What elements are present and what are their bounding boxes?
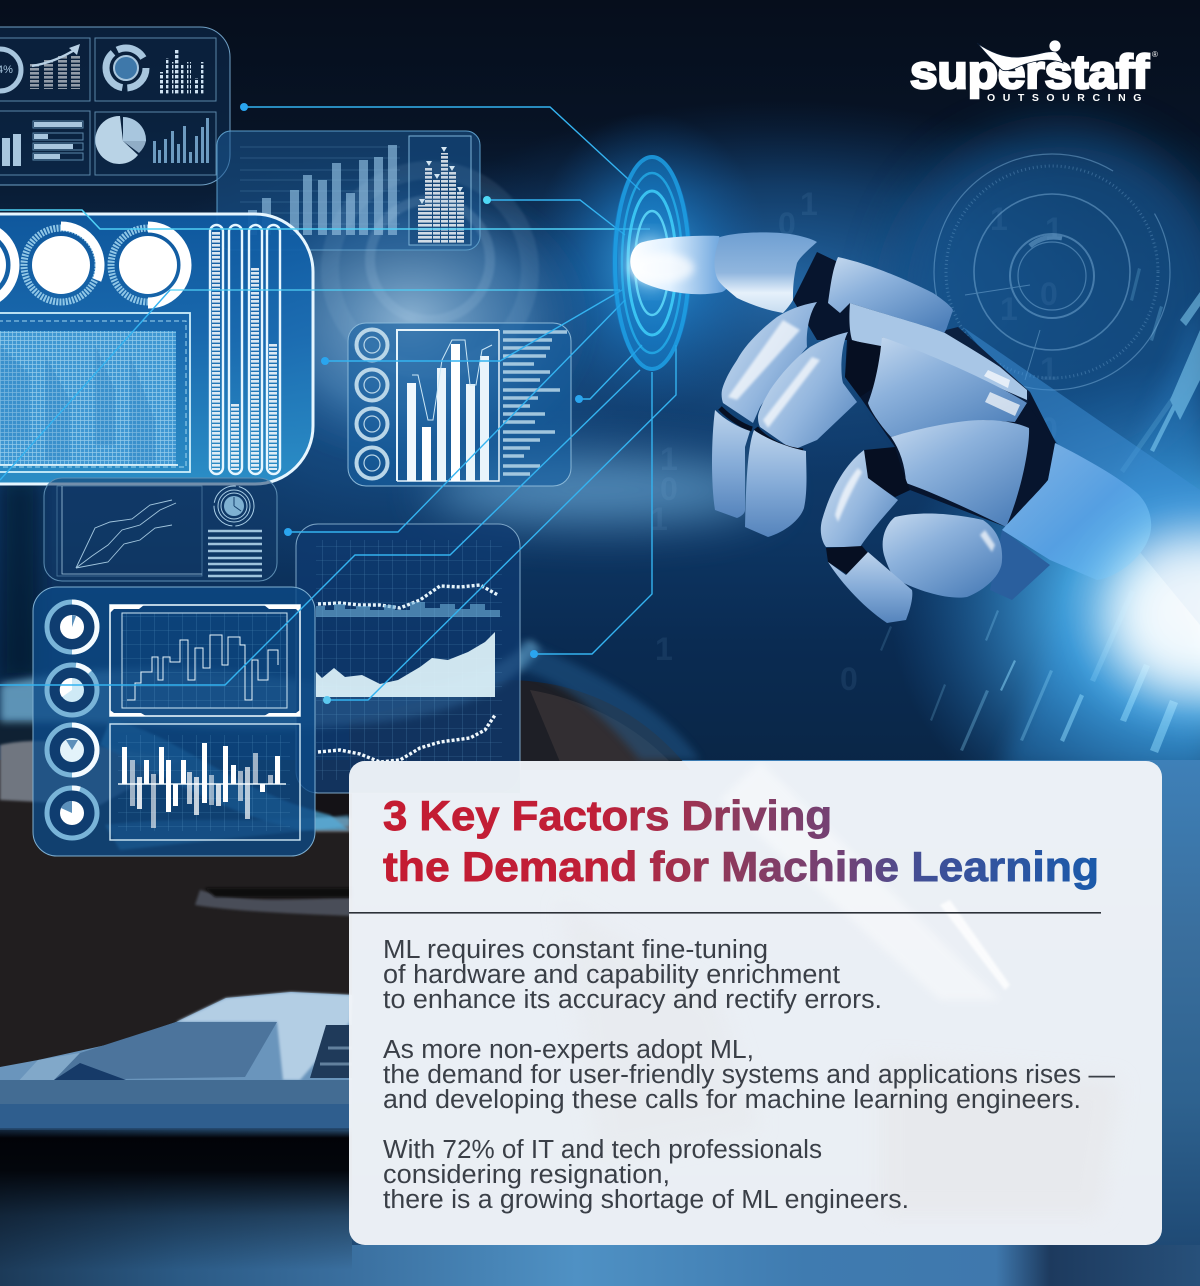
- middle finger arc: [722, 302, 817, 423]
- icon: pie chart: [95, 116, 146, 164]
- right-side data streaks: [880, 268, 1200, 753]
- blue light waves over the hands: [0, 640, 700, 850]
- chart: vertical level tubes: [210, 225, 280, 474]
- title: 3 Key Factors Driving: [383, 792, 832, 839]
- chart: horizontal bars: [503, 332, 567, 474]
- chart: dense mesh area: [0, 313, 190, 472]
- panel: bar chart dashboard: [217, 131, 480, 250]
- back of hand: [868, 337, 1027, 437]
- chart: diverging bars: [110, 724, 300, 840]
- index fingertip: [630, 236, 729, 294]
- light flare bottom right: [1110, 535, 1200, 695]
- factor 2 text: [383, 1036, 1116, 1114]
- title: the Demand for Machine Learning: [383, 843, 1099, 890]
- chart: solid bars: [2, 134, 21, 166]
- knuckle under-shadow: [990, 530, 1050, 600]
- chart: white bars: [397, 330, 499, 481]
- binary digits: faint background texture: 1: [1000, 291, 1018, 327]
- factor 1 text: to enhance its accuracy and rectify errors.: [383, 986, 882, 1014]
- factor 2 text: the demand for user-friendly systems and applications rises —: [383, 1061, 1116, 1089]
- dark wrist band: [1000, 403, 1055, 525]
- chart: progress bars: [33, 121, 83, 160]
- thumb blob: [883, 514, 1002, 598]
- title: [383, 792, 1099, 890]
- binary digits: faint background texture: 0: [840, 661, 858, 697]
- ring segment: [821, 450, 898, 547]
- panel: main gauge dashboard: [0, 214, 313, 484]
- palm plate: [891, 420, 1029, 527]
- text lines placeholder bars: [208, 531, 262, 576]
- chart: step line: [110, 605, 300, 716]
- chart: candlesticks top: [316, 585, 500, 617]
- panel: right small bar dashboard: [348, 323, 571, 486]
- chart: candlesticks bottom: [318, 715, 495, 762]
- HUD rings behind panels: [330, 170, 530, 370]
- factor 1 text: [383, 936, 882, 1014]
- chart: dot columns: [159, 50, 205, 94]
- factor 1 text: of hardware and capability enrichment: [383, 961, 840, 989]
- robot hand: [630, 232, 1200, 625]
- chart: rising lines: [62, 486, 202, 574]
- factor 2 text: As more non-experts adopt ML,: [383, 1036, 754, 1064]
- dark bands between fingers: [720, 408, 803, 451]
- panel: lower-left gauges and charts: [33, 587, 315, 856]
- icon: status rings: [47, 602, 97, 838]
- lower finger two: [745, 430, 806, 537]
- panel: stock charts: [296, 524, 520, 793]
- logo: superstaff outsourcing: ®: [1152, 50, 1158, 59]
- binary digits: faint background texture: 0: [1040, 276, 1058, 312]
- ring finger arc: [758, 332, 857, 450]
- forearm: [1002, 443, 1151, 580]
- glowing fingertip: [630, 253, 694, 283]
- index finger segment: [714, 232, 817, 313]
- translucent forearm extension: [963, 327, 1200, 625]
- lower finger one: [712, 410, 750, 518]
- panel: step and line chart: [44, 478, 277, 581]
- chart: equalizer columns: [418, 153, 464, 244]
- binary digits: faint background texture: [650, 186, 1063, 697]
- binary digits: faint background texture: 0: [1040, 411, 1058, 447]
- dark small joint: [826, 546, 868, 575]
- binary digits: faint background texture: 1: [990, 201, 1008, 237]
- divider rule: [349, 912, 1101, 914]
- touch target rings: [612, 155, 692, 371]
- index finger knuckle: [828, 257, 953, 333]
- binary digits: faint background texture: 1: [655, 631, 673, 667]
- rear dark strip: [940, 327, 1030, 404]
- dark joint lower: [864, 447, 910, 497]
- chart: rising bars with arrow: [30, 44, 80, 89]
- factor 1 text: ML requires constant fine-tuning: [383, 936, 768, 964]
- binary digits: faint background texture: 1: [660, 441, 678, 477]
- photo of hands on keyboard: [0, 680, 1200, 1286]
- bottom segment: [828, 552, 912, 623]
- binary digits: faint background texture: 1: [1045, 211, 1063, 247]
- second knuckle strip: [849, 303, 1027, 400]
- right HUD circle: [934, 154, 1170, 390]
- chart: thin bars: [153, 118, 209, 163]
- icon: concentric pie: [214, 486, 254, 526]
- laptop and keyboard: [0, 992, 352, 1100]
- chart: white area: [316, 632, 495, 697]
- factor 2 text: and developing these calls for machine learning engineers.: [383, 1086, 1081, 1114]
- factor 3 text: [383, 1136, 909, 1214]
- text card: [349, 761, 1162, 1245]
- binary digits: faint background texture: 1: [800, 186, 818, 222]
- binary digits: faint background texture: 0: [778, 206, 796, 242]
- background behind card and edges: [349, 760, 1200, 1246]
- dark joint centre: [845, 340, 881, 397]
- dark skin of the hands: [0, 760, 352, 1080]
- hand highlights: [728, 320, 1020, 552]
- binary digits: faint background texture: 1: [1040, 351, 1058, 387]
- icon: ring gauges: [0, 225, 186, 305]
- logo: superstaff outsourcing: superstaff: [910, 45, 1149, 98]
- icon: segmented donut: [106, 48, 146, 88]
- binary digits: faint background texture: 1: [650, 501, 668, 537]
- panel: top-left dashboard: [0, 27, 230, 185]
- icon: percent gauge: [0, 49, 21, 91]
- factor 3 text: With 72% of IT and tech professionals: [383, 1136, 822, 1164]
- factor 3 text: considering resignation,: [383, 1161, 670, 1189]
- logo: superstaff outsourcing: OUTSOURCING: [987, 92, 1147, 104]
- dark hand underlayer: [793, 252, 1056, 527]
- binary digits: faint background texture: 0: [660, 471, 678, 507]
- factor 3 text: there is a growing shortage of ML engineers.: [383, 1186, 909, 1214]
- connector lines and dots: [0, 103, 676, 704]
- icon: small rings: [356, 330, 388, 478]
